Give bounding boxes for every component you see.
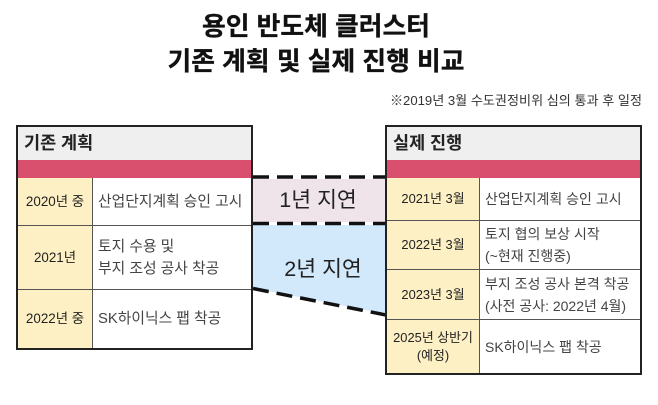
year: 2022	[18, 290, 93, 348]
panel heading: 실제 진행	[393, 133, 462, 153]
year: 2021	[18, 226, 93, 290]
year: 2023 March: 2023년 3월	[401, 286, 465, 302]
year: 2021 March	[387, 178, 480, 221]
year: 2022 March	[387, 221, 480, 270]
milestone: 2021: 부지 조성 공사 착공	[98, 260, 219, 276]
panel heading: 기존 계획	[24, 133, 93, 153]
year: 2020	[18, 178, 93, 226]
year: first half 2025: 2025년 상반기	[393, 330, 473, 344]
milestone: 2023 March: (사전 공사: 2022년 4월)	[485, 298, 626, 314]
milestone: 2022 March: (~현재 진행중)	[485, 248, 571, 264]
milestone: 2020: 산업단지계획 승인 고시	[98, 194, 242, 210]
milestone: 2022 March: 토지 협의 보상 시작	[485, 226, 600, 242]
milestone: 2020	[93, 178, 251, 226]
milestone: 2022	[93, 290, 251, 348]
label: 2-year delay: 2년 지연	[284, 256, 362, 281]
title: 용인 반도체 클러스터	[202, 13, 430, 41]
milestone: 2021 March	[480, 178, 640, 221]
label: 1-year delay: 1년 지연	[279, 187, 357, 212]
year: first half 2025: (예정)	[417, 348, 449, 362]
year: 2022: 2022년 중	[26, 311, 84, 326]
dashed line: middle	[253, 222, 386, 225]
milestone: 2022: SK하이닉스 팹 착공	[98, 311, 221, 327]
pink bar	[387, 160, 640, 178]
title	[168, 13, 464, 76]
year: first half 2025	[387, 320, 480, 373]
year: 2021 March: 2021년 3월	[401, 191, 465, 206]
year: 2021: 2021년	[34, 250, 76, 264]
year: 2023 March	[387, 270, 480, 320]
dashed line: top	[253, 175, 386, 179]
milestone: 2023 March: 부지 조성 공사 본격 착공	[485, 276, 629, 292]
panel heading	[18, 127, 251, 160]
milestone: 2023 March	[480, 270, 640, 320]
title: 기존 계획 및 실제 진행 비교	[168, 48, 464, 76]
delay connector graphic	[253, 175, 385, 317]
2-year delay band	[252, 225, 386, 314]
milestone: 2022 March	[480, 221, 640, 270]
pink bar	[18, 160, 251, 178]
year: 2020: 2020년 중	[26, 194, 84, 208]
schedule footnote: ※2019년 3월 수도권정비위 심의 통과 후 일정	[390, 93, 642, 108]
milestone: first half 2025: SK하이닉스 팹 착공	[485, 338, 602, 354]
panel: actual progress	[385, 125, 642, 375]
1-year delay band	[252, 179, 386, 222]
dashed line: diagonal	[253, 288, 386, 315]
year: 2022 March: 2022년 3월	[401, 237, 465, 252]
panel heading	[387, 127, 640, 160]
milestone: 2021: 토지 수용 및	[98, 238, 174, 254]
panel: original plan	[16, 125, 253, 350]
milestone: first half 2025	[480, 320, 640, 373]
milestone: 2021	[93, 226, 251, 290]
milestone: 2021 March: 산업단지계획 승인 고시	[485, 191, 622, 207]
